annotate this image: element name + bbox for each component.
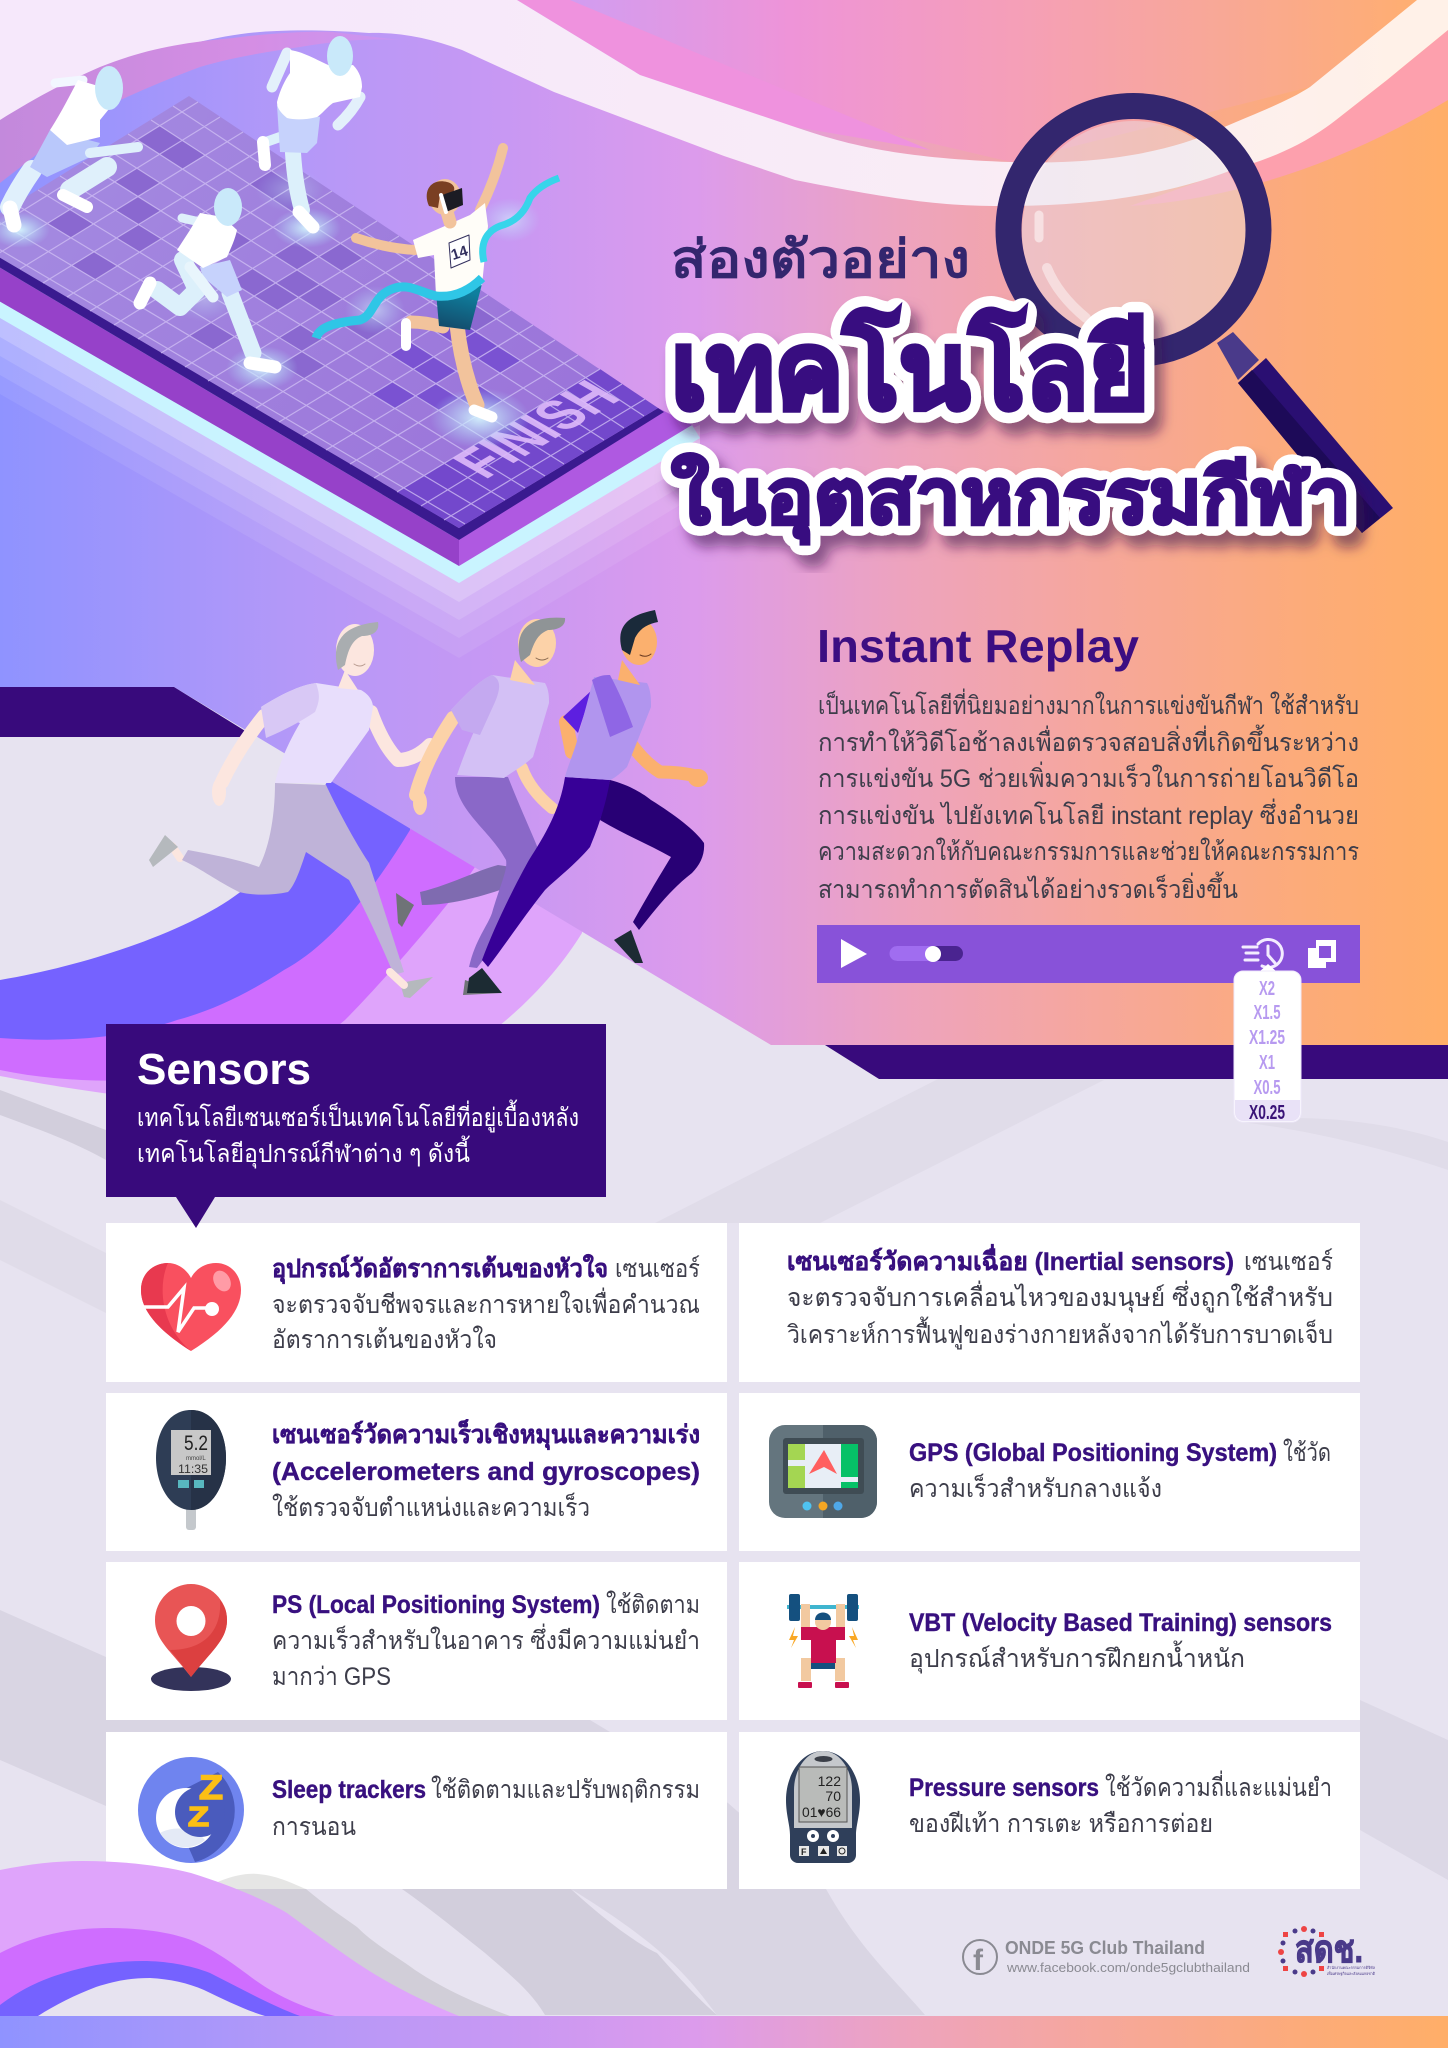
- icon: moon sleep: Z: [199, 1769, 223, 1807]
- icon: glucose-style meter: 5.2: [184, 1432, 208, 1455]
- card: sleep trackers: ใช้ติดตามและปรับพฤติกรรม: [431, 1775, 700, 1804]
- bib number: 14: [449, 242, 471, 264]
- icon: play: [841, 939, 867, 968]
- card: inertial sensors: เซนเซอร์: [1244, 1248, 1333, 1276]
- platform: isometric finish track: [0, 96, 692, 566]
- shirt: [413, 203, 488, 296]
- icon: weightlifter: [787, 1594, 859, 1688]
- footer: Facebook credit: ONDE 5G Club Thailand: [1005, 1938, 1205, 1958]
- card: heart rate: [106, 1197, 727, 1382]
- background: large grey shape behind lower cards: [0, 1610, 925, 2015]
- icon: Facebook: [963, 1940, 997, 1977]
- card: heart rate: อุปกรณ์วัดอัตราการเต้นของหัวใจ: [272, 1253, 608, 1285]
- footer: Facebook credit: [963, 1938, 1250, 1977]
- text block: Instant Replay description: ความสะดวกให้กับคณะกรรมการและช่วยให้คณะกรรมการ: [818, 837, 1359, 866]
- text block: Instant Replay description: เป็นเทคโนโลยีที่นิยมอย่างมากในการแข่งขันกีฬา ใช้สำหรับ: [818, 688, 1359, 720]
- card: GPS: ใช้วัด: [1283, 1438, 1331, 1467]
- back leg: [411, 322, 443, 327]
- icon: pressure device: 122: [818, 1773, 841, 1789]
- ghost runner: left: [10, 66, 138, 225]
- card: local positioning system: [106, 1562, 727, 1720]
- bib number: [449, 235, 471, 268]
- runner 2: mid: [396, 618, 565, 995]
- neck and head: [445, 205, 450, 222]
- card: GPS: ความเร็วสำหรับกลางแจ้ง: [909, 1473, 1162, 1503]
- background wave: grey under left arcs: [0, 1090, 106, 1160]
- title line 1: ส่องตัวอย่าง: [671, 231, 970, 289]
- playback speed dropdown: [1234, 964, 1301, 1124]
- background: darker bottom band: [402, 1889, 717, 2015]
- footer: organisation logo: [1278, 1926, 1376, 1977]
- main runner with VR headset: [356, 148, 503, 417]
- runner 1: pale: [149, 622, 433, 998]
- icon: pressure device: [786, 1751, 860, 1863]
- slider: [890, 946, 963, 962]
- card: inertial sensors: [739, 1223, 1360, 1382]
- playback speed dropdown: X0.25: [1249, 1102, 1285, 1124]
- playback speed dropdown: X2: [1259, 978, 1275, 1000]
- card: GPS: [739, 1393, 1360, 1551]
- background: grey band right margin: [1360, 1700, 1448, 1880]
- card: local positioning system: ใช้ติดตาม: [606, 1590, 700, 1619]
- handle neck: [1217, 332, 1259, 380]
- card: pressure sensors: ใช้วัดความถี่และแม่นยำ: [1105, 1770, 1332, 1802]
- background: main gradient area: [0, 0, 1448, 1045]
- deck grid lines: [0, 102, 645, 524]
- dark band: left: [0, 687, 255, 737]
- playback speed dropdown: X1.25: [1249, 1027, 1285, 1049]
- icon: moon sleep: Z: [188, 1801, 209, 1832]
- translucent grey wave: [200, 1874, 510, 2016]
- icon: heart: [141, 1263, 241, 1351]
- painted word FINISH: FINISH: [439, 372, 634, 486]
- text block: Instant Replay description: การทำให้วิดีโอช้าลงเพื่อตรวจสอบสิ่งที่เกิดขึ้นระหว่าง: [818, 724, 1359, 757]
- icon: glucose-style meter: 11:35: [178, 1462, 208, 1476]
- top decoration: pink stripe: [517, 0, 930, 150]
- icon: moon sleep: [138, 1757, 244, 1863]
- shorts: [436, 284, 482, 330]
- arms: [480, 148, 503, 210]
- top decoration: pale wave: [0, 0, 1448, 206]
- runner 3: front: [467, 610, 708, 993]
- title: [671, 231, 1351, 545]
- lens highlights: [1034, 215, 1044, 238]
- card: pressure sensors: Pressure sensors: [909, 1774, 1099, 1802]
- text block: Instant Replay description: การแข่งขัน ไปยังเทคโนโลยี instant replay ซึ่งอำนวย: [818, 798, 1359, 830]
- heading text: Sensors: [137, 1045, 311, 1094]
- footer: organisation logo: สำนักงานคณะกรรมการดิจิทัล: [1327, 1965, 1376, 1970]
- card: accelerometers and gyroscopes: (Accelerometers and gyroscopes): [272, 1458, 700, 1486]
- icon: pressure device: 70: [825, 1788, 841, 1804]
- icon: pressure device: 01♥66: [802, 1804, 841, 1820]
- card: sleep trackers: Sleep trackers: [272, 1776, 426, 1804]
- card: heart rate: เซนเซอร์: [615, 1255, 700, 1283]
- front leg: [457, 325, 477, 405]
- description line 1: เทคโนโลยีเซนเซอร์เป็นเทคโนโลยีที่อยู่เบื้องหลัง: [137, 1099, 579, 1133]
- video player bar: [817, 925, 1360, 983]
- card: inertial sensors: จะตรวจจับการเคลื่อนไหวของมนุษย์ ซึ่งถูกใช้สำหรับ: [787, 1280, 1333, 1313]
- card: inertial sensors: วิเคราะห์การฟื้นฟูของร่างกายหลังจากได้รับการบาดเจ็บ: [787, 1316, 1333, 1350]
- lilac wave: [0, 1861, 459, 2016]
- bottom-left waves: [0, 1861, 510, 2016]
- foot glows: [0, 168, 540, 448]
- magnifying glass: [1008, 106, 1393, 533]
- top decoration: pink region above white wave: [517, 0, 1448, 162]
- card: pressure sensors: [739, 1732, 1360, 1889]
- lens: [1022, 121, 1246, 343]
- card: accelerometers and gyroscopes: เซนเซอร์วัดความเร็วเชิงหมุนและความเร่ง: [272, 1419, 700, 1451]
- playback speed dropdown: X1: [1259, 1052, 1275, 1074]
- platform left face: [0, 235, 459, 566]
- icon: playback speed: [1243, 939, 1282, 967]
- title line 3: ในอุตสาหกรรมกีฬา: [671, 453, 1351, 545]
- top decoration: hump crest: [0, 32, 400, 183]
- background arcs under the runners: [0, 700, 582, 1104]
- card: sleep trackers: การนอน: [272, 1813, 356, 1841]
- card: local positioning system: PS (Local Positioning System): [272, 1591, 600, 1619]
- footer: Facebook credit: www.facebook.com/onde5gclubthailand: [1006, 1960, 1250, 1975]
- text block: Instant Replay description: การแข่งขัน 5G ช่วยเพิ่มความเร็วในการถ่ายโอนวิดีโอ: [818, 761, 1359, 793]
- platform dark edge: [0, 223, 664, 540]
- finish zone: [397, 369, 658, 528]
- blue wave: [0, 1961, 300, 2016]
- icon: picture in picture: [1308, 940, 1336, 968]
- card: local positioning system: มากว่า GPS: [272, 1663, 391, 1691]
- chevron layers under the platform: [0, 250, 700, 658]
- bottom gradient strip: [0, 2016, 1448, 2048]
- top decoration: salmon wave at right: [1130, 30, 1448, 206]
- panel: Sensors heading: [106, 1024, 606, 1197]
- card: pressure sensors: ของฝีเท้า การเตะ หรือการต่อย: [909, 1810, 1213, 1838]
- ring: [1008, 106, 1258, 354]
- footer: organisation logo: เพื่อเศรษฐกิจและสังคมแห่งชาติ: [1327, 1971, 1375, 1976]
- title line 2: เทคโนโลยี: [671, 308, 1149, 431]
- platform right face: [459, 408, 692, 566]
- VR headset: [442, 188, 463, 212]
- magenta wave: [0, 1928, 335, 2016]
- card: heart rate: จะตรวจจับชีพจรและการหายใจเพื่อคำนวณ: [272, 1287, 700, 1319]
- card: sleep trackers: [106, 1732, 727, 1889]
- finish ribbon: [316, 178, 559, 338]
- heading: Instant Replay: Instant Replay: [817, 620, 1139, 672]
- card: VBT sensors: VBT (Velocity Based Training) sensors: [909, 1609, 1332, 1637]
- icon: GPS device: [769, 1425, 877, 1518]
- description line 2: เทคโนโลยีอุปกรณ์กีฬาต่าง ๆ ดังนี้: [137, 1135, 470, 1169]
- icon: glucose-style meter: mmol/L: [186, 1456, 206, 1462]
- platform deck: [0, 96, 658, 528]
- background: pale diagonal bands: [0, 1079, 1448, 1313]
- card: accelerometers and gyroscopes: ใช้ตรวจจับตำแหน่งและความเร็ว: [272, 1492, 590, 1522]
- deck tiles: [48, 126, 496, 379]
- ghost runner: lower: [140, 188, 275, 367]
- title line 3: ในอุตสาหกรรมกีฬา: [671, 453, 1351, 545]
- panel pointer: [176, 1197, 215, 1228]
- text block: Instant Replay description: [818, 688, 1359, 904]
- card: inertial sensors: เซนเซอร์วัดความเฉื่อย (Inertial sensors): [787, 1244, 1234, 1276]
- ghost runner: top centre: [263, 36, 362, 227]
- inner pale wave: [38, 1978, 265, 2016]
- card: accelerometers and gyroscopes: [106, 1393, 727, 1551]
- icon: pressure device: F: [801, 1847, 807, 1857]
- text block: Instant Replay description: สามารถทำการตัดสินได้อย่างรวดเร็วยิ่งขึ้น: [818, 871, 1238, 904]
- card: VBT sensors: อุปกรณ์สำหรับการฝึกยกน้ำหนัก: [909, 1640, 1245, 1674]
- icon: Facebook: f: [973, 1944, 984, 1977]
- card: heart rate: อัตราการเต้นของหัวใจ: [272, 1325, 497, 1354]
- footer: organisation logo: สดช.: [1295, 1929, 1363, 1971]
- card: GPS: GPS (Global Positioning System): [909, 1439, 1277, 1467]
- card: VBT sensors: [739, 1562, 1360, 1720]
- playback speed dropdown: X0.5: [1254, 1077, 1280, 1099]
- handle grip: [1238, 358, 1393, 533]
- playback speed dropdown: X1.5: [1254, 1002, 1280, 1024]
- icon: location pin: [151, 1584, 231, 1691]
- title line 2: เทคโนโลยี: [671, 308, 1149, 431]
- card: local positioning system: ความเร็วสำหรับในอาคาร ซึ่งมีความแม่นยำ: [272, 1623, 700, 1655]
- icon: glucose-style meter: [156, 1410, 226, 1530]
- dark band: right: [825, 1045, 1448, 1079]
